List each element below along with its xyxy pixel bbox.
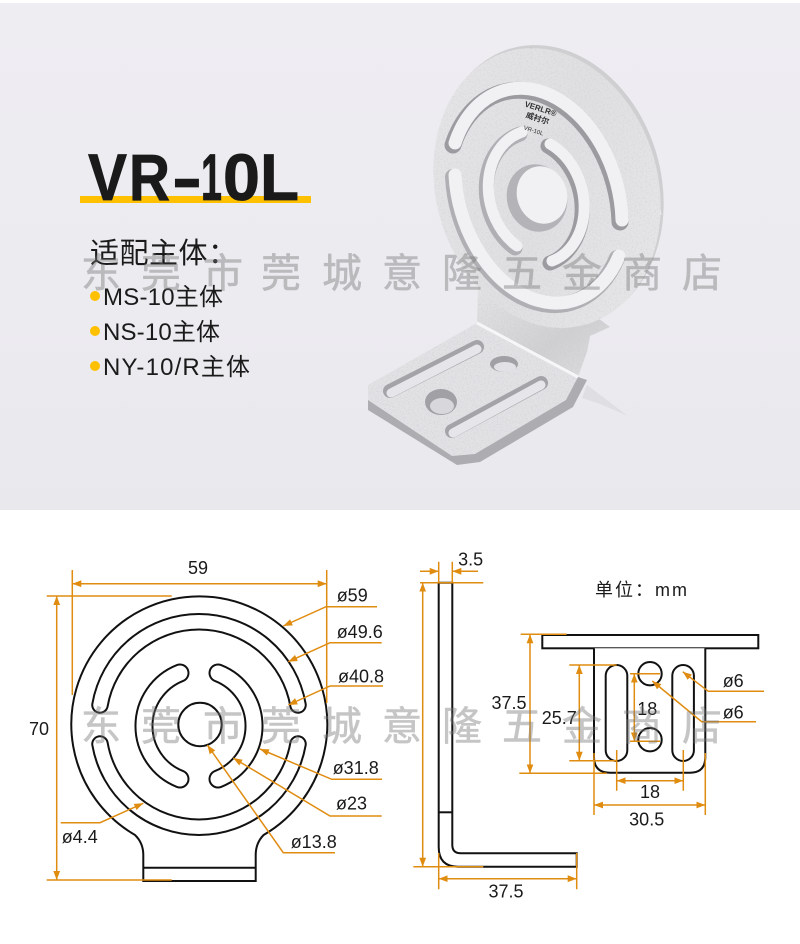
panel: base plate drawing — [491, 634, 764, 830]
dimension: side length 37.5 — [439, 853, 577, 902]
outline: round plate with tab — [71, 596, 327, 881]
brand marking: 威衬尔 — [525, 110, 551, 127]
dimension: thickness 3.5: 3.5 — [458, 550, 483, 570]
callout: ø40.8: ø40.8 — [338, 666, 384, 686]
dimension: width 59: 59 — [188, 558, 208, 578]
list: compatible models — [90, 284, 250, 381]
title: VR-10L: V — [88, 140, 127, 214]
dimension: height 70 — [29, 596, 172, 880]
callout: ø23 — [233, 758, 382, 816]
dimension: side length 37.5: 37.5 — [488, 882, 524, 902]
watermark: upper: 东莞市莞城意隆五金商店 — [81, 252, 722, 296]
dimension: hole spacing 18 — [630, 674, 660, 741]
outline: base plate — [542, 635, 758, 773]
callout: ø6 slot: ø6 — [723, 671, 744, 691]
brand marking: VR-10L — [523, 125, 545, 138]
brand marking — [517, 100, 558, 139]
callout: ø4.4 — [61, 803, 143, 847]
dimension: slot spacing 18 — [617, 750, 683, 802]
callout: ø31.8 — [260, 749, 382, 779]
dimension: width 30.5: 30.5 — [629, 810, 664, 830]
dimension: side height — [413, 583, 483, 867]
dimension: height 70: 70 — [29, 719, 49, 739]
callout: ø31.8: ø31.8 — [333, 758, 379, 778]
callout: ø6 slot — [683, 671, 764, 691]
callout: ø49.6: ø49.6 — [337, 622, 383, 642]
dimension: plate height 37.5: 37.5 — [491, 693, 527, 713]
panel: front view drawing — [29, 558, 384, 881]
photo: metal bracket — [368, 18, 696, 465]
title: VR-10L: R — [129, 140, 170, 214]
title: VR-10L: L — [260, 140, 299, 214]
panel: product hero — [0, 3, 800, 510]
callout: ø23: ø23 — [336, 794, 367, 814]
foot plate — [368, 323, 587, 465]
dimension: width 30.5 — [594, 753, 705, 830]
dimension: thickness 3.5 — [420, 550, 483, 583]
watermark: lower: 东莞市莞城意隆五金商店 — [81, 705, 722, 749]
title: VR-10L — [80, 140, 311, 214]
title: VR-10L: 1 — [201, 140, 222, 214]
title: VR-10L: 0 — [223, 140, 260, 214]
brand marking: VERLR® — [523, 100, 558, 118]
dimension: hole spacing 18: 18 — [637, 699, 657, 719]
callout: ø40.8 — [288, 666, 384, 705]
list: compatible models: NS-10主体 — [103, 319, 220, 346]
title: VR-10L: - — [172, 140, 202, 214]
outline: L profile — [439, 583, 577, 867]
unit label: 单位：mm — [595, 580, 687, 600]
list: compatible models: MS-10主体 — [103, 284, 223, 311]
dimension: plate height 37.5 — [491, 634, 607, 773]
list: compatible models: NY-10/R主体 — [103, 354, 250, 381]
callout: ø6 hole — [652, 681, 756, 722]
panel: side view drawing — [413, 550, 577, 902]
callout: ø4.4: ø4.4 — [62, 827, 98, 847]
callout: ø13.8 — [207, 745, 337, 853]
callout: ø6 hole: ø6 — [723, 702, 744, 722]
heading: compatible bodies: 适配主体： — [90, 237, 237, 270]
callout: ø13.8: ø13.8 — [291, 832, 337, 852]
callout: ø59: ø59 — [337, 586, 368, 606]
dimension: slot length 25.7 — [542, 665, 617, 761]
dimension: slot length 25.7: 25.7 — [542, 708, 577, 728]
callout: ø49.6 — [288, 622, 383, 662]
dimension: slot spacing 18: 18 — [640, 782, 660, 802]
dimension: width 59 — [72, 558, 327, 703]
callout: ø59 — [283, 586, 377, 626]
